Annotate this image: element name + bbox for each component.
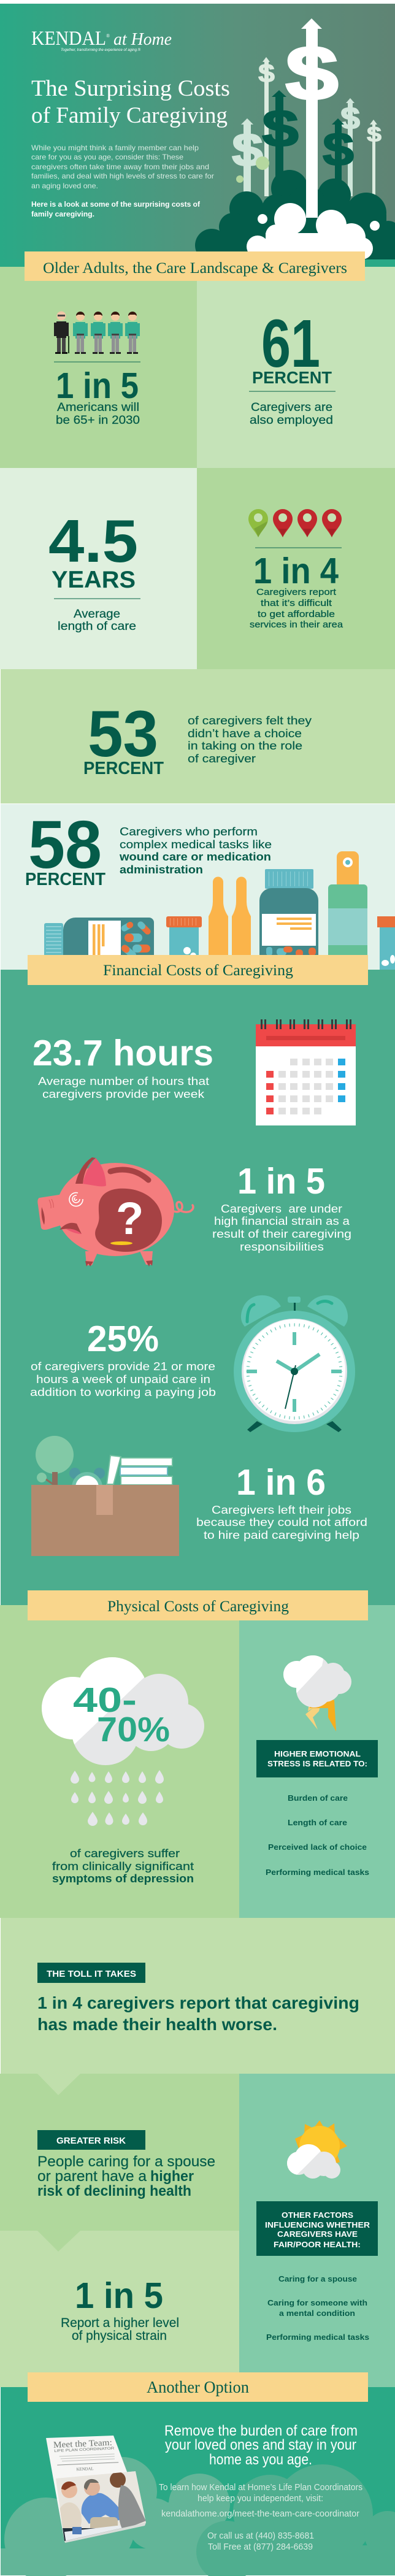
stat: 4.5 years: YEARS <box>52 567 136 593</box>
stat: 25 percent <box>30 1319 216 1398</box>
panel: 53 percent <box>1 669 395 803</box>
stat: 61 percent: 61 <box>261 306 320 381</box>
stat: 1 in 5 Americans: be 65+ in 2030 <box>56 414 140 427</box>
stat: 1 in 5 financial strain: result of their caregiving <box>212 1227 351 1240</box>
logo <box>31 28 172 52</box>
brochure: meet the team: Meet the Team: <box>53 2438 112 2450</box>
panel: 58 percent: PERCENT <box>25 870 105 889</box>
panel: greater risk <box>0 2074 239 2231</box>
stat: 1 in 4 services: to get affordable <box>258 609 335 619</box>
stat: 1 in 5 financial strain: high financial strain as a <box>214 1214 350 1227</box>
callout: other factors: OTHER FACTORS <box>282 2210 353 2220</box>
illustration: rising dollar arrows: $ <box>262 99 299 158</box>
intro text: caregivers often take time away from their jobs and <box>31 163 209 171</box>
icon: piggy bank: ? <box>116 1193 144 1244</box>
icon: alarm clock <box>234 1295 355 1432</box>
panel: the toll it takes <box>1 1918 395 2074</box>
stat: 1 in 5 Americans <box>54 312 140 427</box>
text: symptoms of depression: symptoms of depression <box>52 1873 194 1885</box>
heading banner: another option <box>28 2372 368 2402</box>
panel: greater risk: risk of declining health <box>37 2183 191 2199</box>
illustration: rising dollar arrows: $ <box>285 29 339 117</box>
logo: Together, transforming the experience of aging.® <box>61 47 140 52</box>
callout: other factors: INFLUENCING WHETHER <box>265 2220 370 2229</box>
list: health factors: Caring for a spouse <box>278 2274 357 2283</box>
stat: 1 in 5 financial strain: 1 in 5 <box>237 1161 325 1202</box>
panel: greater risk: People caring for a spouse <box>37 2153 215 2170</box>
icon: storm cloud <box>283 1655 351 1731</box>
stat: 1 in 6: 1 in 6 <box>236 1462 326 1503</box>
text: call to action <box>164 2423 358 2468</box>
text: contact details: kendalathome.org/meet-the-team-care-coordinator <box>161 2509 359 2519</box>
illustration: rising dollar arrows: $ <box>340 101 360 136</box>
intro text: While you might think a family member can help <box>31 144 199 152</box>
text: symptoms of depression: of caregivers suffer <box>70 1847 180 1860</box>
panel: physical strain: Report a higher level <box>61 2316 179 2330</box>
panel: 53 percent: of caregiver <box>188 752 256 765</box>
callout: other factors: CAREGIVERS HAVE <box>277 2229 358 2239</box>
intro text: an aging loved one. <box>31 182 98 190</box>
text: symptoms of depression <box>52 1847 194 1885</box>
intro text <box>31 144 214 218</box>
stat: 4.5 years: length of care <box>58 620 136 633</box>
heading banner: older adults: Older Adults, the Care Landscape & Caregivers <box>43 260 347 277</box>
icon: map pins <box>248 509 342 537</box>
illustration: rising dollar arrows: $ <box>323 123 354 176</box>
panel: physical strain <box>0 2231 239 2387</box>
illustration: rising dollar arrows: $ <box>367 123 382 147</box>
list: health factors: Caring for someone with <box>267 2298 367 2307</box>
illustration: medicine bottles <box>44 851 395 970</box>
callout: other factors <box>256 2201 378 2256</box>
stat: 1 in 4 services: services in their area <box>250 619 343 630</box>
stat: 1 in 6 <box>196 1462 367 1541</box>
section background: physical costs <box>0 1605 395 1918</box>
stat: 1 in 6: to hire paid caregiving help <box>204 1528 359 1541</box>
section background: stat grid <box>0 267 395 669</box>
list: health factors <box>266 2274 369 2342</box>
stat: 1 in 5 financial strain: Caregivers are under <box>221 1202 342 1215</box>
stat: 23.7 hours <box>33 1033 213 1100</box>
panel: physical strain: 1 in 5 <box>75 2275 163 2316</box>
panel: 58 percent: complex medical tasks like <box>120 838 272 851</box>
panel: 58 percent <box>1 804 395 970</box>
icon: piggy bank <box>37 1157 193 1267</box>
panel: the toll it takes: THE TOLL IT TAKES <box>47 1969 136 1979</box>
panel: the toll it takes: has made their health worse. <box>37 2015 277 2034</box>
icon: sun and cloud <box>287 2120 347 2179</box>
heading banner: physical costs <box>28 1590 368 1620</box>
list: stress factors: Burden of care <box>288 1793 348 1803</box>
decorative clouds <box>1 2457 395 2576</box>
callout: higher emotional stress: STRESS IS RELATED TO: <box>267 1759 367 1768</box>
brochure: meet the team <box>46 2436 147 2544</box>
list: health factors: Performing medical tasks <box>266 2333 369 2342</box>
panel: 53 percent: 53 <box>88 697 158 770</box>
list: stress factors: Performing medical tasks <box>266 1868 369 1877</box>
list: stress factors: Perceived lack of choice <box>268 1842 367 1852</box>
heading banner: physical costs: Physical Costs of Caregiving <box>107 1598 289 1615</box>
panel: physical strain: of physical strain <box>72 2329 167 2343</box>
panel: 53 percent: didn’t have a choice <box>188 727 302 740</box>
stat: 23.7 hours: 23.7 hours <box>33 1033 213 1073</box>
stat: 61 percent: also employed <box>250 414 333 427</box>
panel: 58 percent: 58 <box>28 807 102 883</box>
panel: greater risk: or parent have a <box>37 2168 147 2185</box>
text: call to action: your loved ones and stay in your <box>165 2437 356 2453</box>
list: health factors: a mental condition <box>279 2309 355 2318</box>
intro text: family caregiving. <box>31 210 94 218</box>
panel: greater risk: higher <box>150 2168 194 2185</box>
title: The Surprising Costs <box>31 76 230 101</box>
stat: 25 percent: addition to working a paying job <box>30 1386 216 1398</box>
stat: 61 percent: Caregivers are <box>251 401 332 414</box>
stat: 1 in 6: Caregivers left their jobs <box>212 1503 351 1516</box>
logo: ® <box>106 33 110 39</box>
panel: another option <box>1 2387 395 2576</box>
text: call to action: home as you age. <box>209 2451 312 2468</box>
illustration: rising dollar arrows: $ <box>258 59 275 88</box>
stat: 61 percent: PERCENT <box>252 368 332 387</box>
stat: 4.5 years <box>48 507 140 633</box>
intro text: care for you as you age, consider this: These <box>31 153 183 161</box>
section background: financial costs <box>1 970 395 1605</box>
stat: 1 in 5 financial strain <box>212 1161 351 1253</box>
stat: 23.7 hours: caregivers provide per week <box>42 1087 205 1100</box>
stat: 1 in 4 services: Caregivers report <box>256 587 337 597</box>
callout: other factors: FAIR/POOR HEALTH: <box>274 2240 361 2249</box>
brochure: meet the team: KENDAL <box>76 2466 94 2472</box>
panel: greater risk: GREATER RISK <box>56 2136 126 2146</box>
list: stress factors: Length of care <box>288 1818 347 1827</box>
title <box>31 76 230 128</box>
icon: rain drops <box>71 1770 164 1826</box>
icon: rain cloud with statistic <box>42 1657 204 1826</box>
text: contact details <box>159 2483 362 2552</box>
intro text: families, and deal with high levels of stress to care for <box>31 172 214 180</box>
panel: other factors column <box>239 2074 395 2387</box>
brochure: meet the team: LIFE PLAN COORDINATOR <box>54 2447 115 2453</box>
stat: 1 in 4 services <box>248 509 343 630</box>
heading banner: financial costs: Financial Costs of Caregiving <box>103 962 294 979</box>
panel: 58 percent: wound care or medication <box>119 850 271 863</box>
stat: 1 in 5 Americans: Americans will <box>57 401 139 414</box>
stat: 1 in 4 services: that it’s difficult <box>261 598 332 608</box>
panel: 53 percent: in taking on the role <box>188 739 302 752</box>
text: contact details: help keep you independent, visit: <box>198 2494 323 2504</box>
stat: 61 percent <box>249 306 336 427</box>
illustration: rising dollar arrows <box>195 18 395 262</box>
icon: rain cloud with statistic: 40- <box>73 1681 137 1720</box>
text: call to action: Remove the burden of care from <box>164 2423 358 2439</box>
stat: 1 in 4 services: 1 in 4 <box>253 551 339 591</box>
icon: moving box <box>31 1436 179 1556</box>
stat: 1 in 5 Americans: 1 in 5 <box>56 366 139 406</box>
stat: 4.5 years: Average <box>74 608 120 621</box>
icon: calendar <box>256 1019 356 1125</box>
illustration: rising dollar arrows: $ <box>232 124 263 177</box>
panel: 53 percent: PERCENT <box>83 759 164 778</box>
stat: 1 in 6: because they could not afford <box>196 1516 367 1528</box>
panel: 53 percent: of caregivers felt they <box>188 714 312 727</box>
stat: 25 percent: hours a week of unpaid care in <box>36 1373 210 1386</box>
heading banner: financial costs <box>28 955 368 985</box>
text: contact details: Or call us at (440) 835-8681 <box>207 2531 314 2541</box>
stat: 4.5 years: 4.5 <box>48 507 138 575</box>
panel: the toll it takes: 1 in 4 caregivers report that caregiving <box>37 1993 359 2012</box>
panel: 58 percent: administration <box>120 863 203 876</box>
logo: KENDAL <box>31 28 106 50</box>
stat: 1 in 5 financial strain: responsibilities <box>240 1240 324 1253</box>
stat: 25 percent: of caregivers provide 21 or more <box>31 1360 215 1373</box>
stat: 25 percent: 25% <box>87 1319 159 1359</box>
intro text: Here is a look at some of the surprising costs of <box>31 200 201 209</box>
text: contact details: Toll Free at (877) 284-6639 <box>208 2542 313 2552</box>
heading banner: another option: Another Option <box>147 2378 249 2396</box>
callout: higher emotional stress <box>256 1740 378 1777</box>
callout: higher emotional stress: HIGHER EMOTIONAL <box>274 1749 361 1758</box>
text: contact details: To learn how Kendal at Home’s Life Plan Coordinators <box>159 2483 362 2493</box>
panel: 58 percent: Caregivers who perform <box>120 825 258 838</box>
hero panel <box>0 4 395 267</box>
stat: 23.7 hours: Average number of hours that <box>38 1075 209 1087</box>
list: stress factors <box>266 1793 369 1877</box>
title: of Family Caregiving <box>31 103 228 128</box>
heading banner: older adults <box>25 251 365 281</box>
icon: older adult and four younger people <box>54 312 140 354</box>
icon: rain cloud with statistic: 70% <box>97 1710 170 1749</box>
text: symptoms of depression: from clinically significant <box>52 1860 194 1873</box>
logo: at Home <box>113 29 172 49</box>
